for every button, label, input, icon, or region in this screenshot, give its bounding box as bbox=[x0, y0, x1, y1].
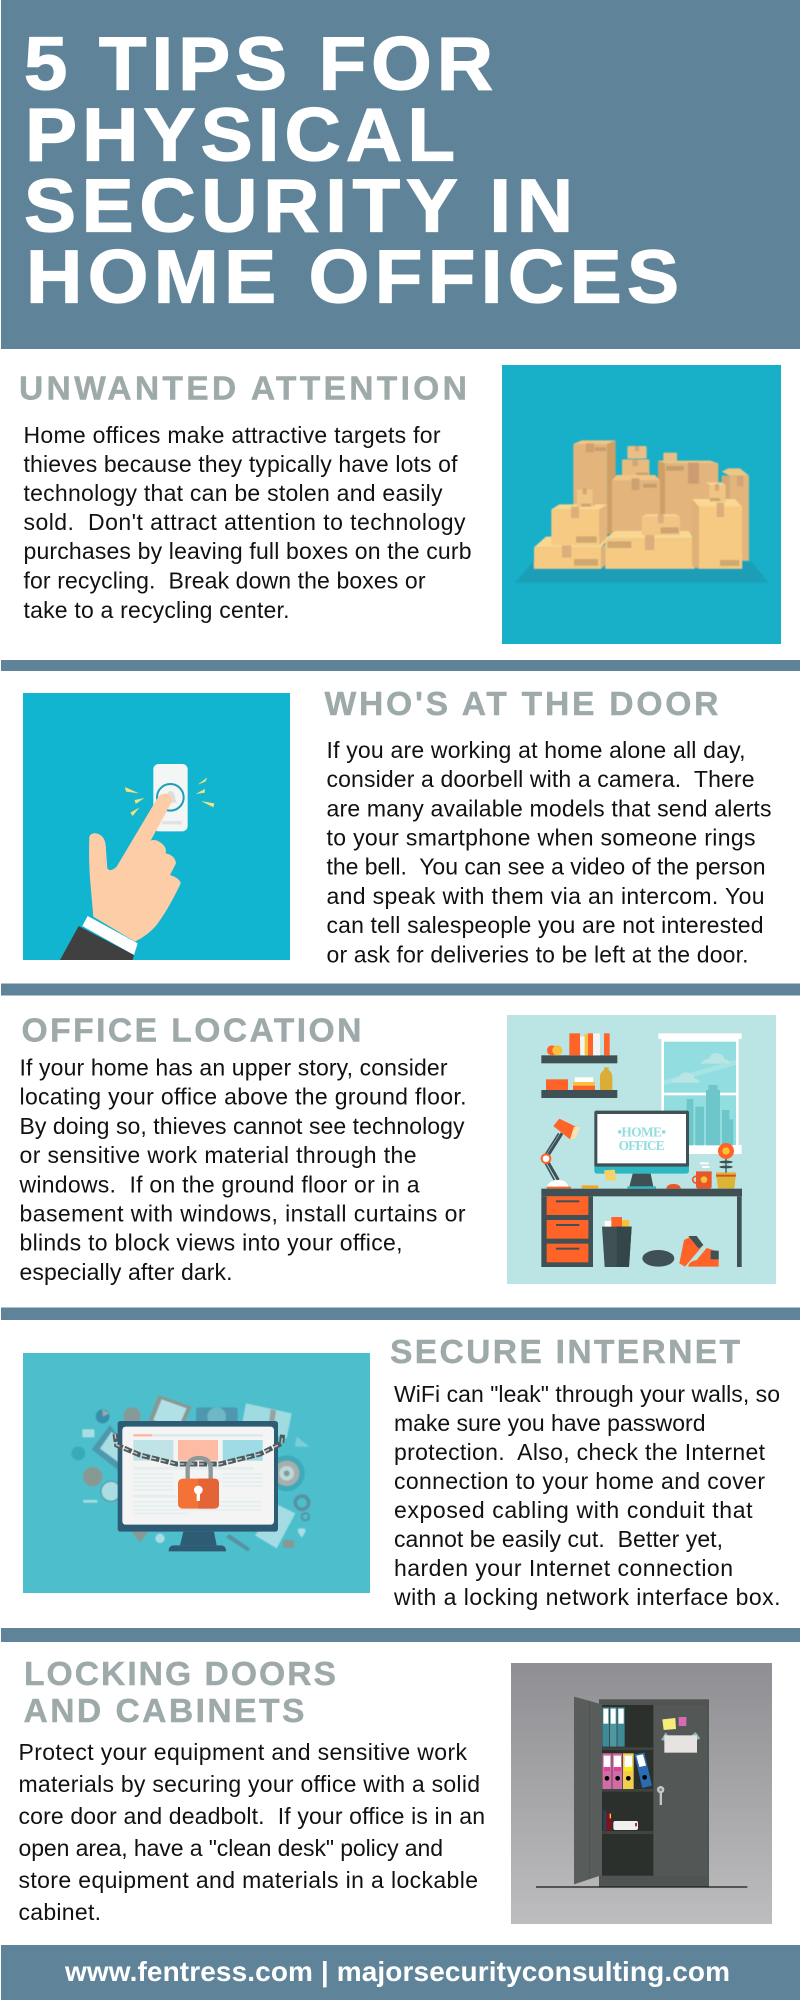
title: 5 TIPS FOR bbox=[24, 23, 493, 106]
title: SECURITY IN bbox=[24, 165, 573, 248]
divider bbox=[1, 1308, 800, 1320]
heading: locking doors and cabinets: LOCKING DOORS bbox=[24, 1656, 336, 1693]
center tall box bbox=[612, 475, 660, 534]
text block: locking doors and cabinets: core door and deadbolt. If your office is in an bbox=[18, 1803, 485, 1829]
text block: secure internet bbox=[393, 1381, 780, 1610]
books bbox=[603, 1810, 638, 1831]
left upper box bbox=[551, 486, 607, 545]
text block: unwanted attention: technology that can be stolen and easily bbox=[24, 480, 443, 506]
text block: locking doors and cabinets bbox=[18, 1739, 485, 1925]
panel: unwanted attention bbox=[19, 365, 781, 644]
text block: office location: or sensitive work material through the bbox=[20, 1142, 416, 1168]
heading: office location: OFFICE LOCATION bbox=[22, 1013, 361, 1050]
panel: secure internet bbox=[23, 1334, 780, 1610]
panel: who's at the door bbox=[23, 686, 771, 967]
monitor: OFFICE bbox=[619, 1138, 665, 1153]
text block: secure internet: connection to your home and cover bbox=[394, 1468, 765, 1494]
center wide box bbox=[605, 514, 695, 569]
chain bbox=[115, 1433, 283, 1464]
panel: locking doors and cabinets bbox=[18, 1656, 772, 1925]
footer links: www.fentress.com | majorsecurityconsulting.com bbox=[64, 1956, 730, 1987]
panel: office location bbox=[18, 1013, 776, 1285]
small stack bbox=[622, 446, 649, 477]
binders bbox=[602, 1707, 652, 1789]
shelves bbox=[541, 1033, 617, 1098]
text block: unwanted attention bbox=[24, 422, 472, 623]
text block: secure internet: protection. Also, check the Internet bbox=[394, 1439, 766, 1465]
desk bbox=[541, 1189, 742, 1267]
text block: unwanted attention: purchases by leaving full boxes on the curb bbox=[24, 538, 472, 564]
text block: secure internet: exposed cabling with conduit that bbox=[394, 1497, 753, 1523]
text block: locking doors and cabinets: open area, have a "clean desk" policy and bbox=[18, 1835, 443, 1861]
waste bin bbox=[602, 1217, 632, 1267]
illustration: locked monitor bbox=[23, 1353, 370, 1593]
text block: secure internet: make sure you have password bbox=[394, 1410, 706, 1436]
text block: office location: basement with windows, install curtains or bbox=[20, 1200, 466, 1226]
text block: secure internet: with a locking network interface box. bbox=[393, 1584, 780, 1610]
left lower box bbox=[534, 537, 610, 569]
illustration: cardboard boxes bbox=[502, 365, 781, 644]
heading: locking doors and cabinets bbox=[23, 1656, 336, 1730]
text block: office location: windows. If on the ground floor or in a bbox=[18, 1171, 420, 1197]
divider bbox=[1, 1628, 800, 1642]
text block: unwanted attention: thieves because they typically have lots of bbox=[24, 451, 458, 477]
heading: locking doors and cabinets: AND CABINETS bbox=[23, 1693, 304, 1730]
text block: who's at the door: can tell salespeople you are not interested bbox=[326, 912, 764, 938]
heading: unwanted attention: UNWANTED ATTENTION bbox=[19, 371, 467, 407]
text block: who's at the door: the bell. You can see a video of the person bbox=[326, 854, 766, 880]
far right box bbox=[722, 468, 749, 561]
text block: who's at the door: If you are working at home alone all day, bbox=[326, 737, 746, 763]
illustration: open cabinet bbox=[511, 1663, 772, 1924]
tall box bbox=[573, 440, 616, 534]
divider bbox=[1, 660, 800, 671]
background icons bbox=[71, 1395, 309, 1552]
text block: unwanted attention: sold. Don't attract attention to technology bbox=[24, 509, 466, 535]
heading: secure internet: SECURE INTERNET bbox=[390, 1334, 740, 1371]
title bbox=[24, 23, 679, 319]
text block: locking doors and cabinets: materials by securing your office with a solid bbox=[18, 1771, 480, 1797]
illustration: home office desk bbox=[507, 1015, 776, 1284]
text block: unwanted attention: for recycling. Break down the boxes or bbox=[24, 568, 426, 594]
text block: who's at the door: and speak with them via an intercom. You bbox=[326, 883, 764, 909]
text block: unwanted attention: take to a recycling center. bbox=[24, 597, 290, 623]
text block: locking doors and cabinets: cabinet. bbox=[18, 1899, 101, 1925]
text block: office location: By doing so, thieves cannot see technology bbox=[20, 1113, 465, 1139]
text block: who's at the door: are many available models that send alerts bbox=[326, 795, 772, 821]
football and shoes bbox=[642, 1236, 719, 1267]
desk items bbox=[582, 1143, 736, 1189]
window bbox=[658, 1033, 742, 1154]
divider bbox=[1, 984, 800, 996]
text block: office location: especially after dark. bbox=[20, 1259, 232, 1285]
padlock bbox=[178, 1458, 219, 1509]
title: PHYSICAL bbox=[25, 94, 455, 177]
monitor: •HOME• bbox=[617, 1125, 666, 1140]
notes bbox=[661, 1717, 700, 1753]
title banner bbox=[1, 0, 800, 349]
title: HOME OFFICES bbox=[26, 236, 679, 319]
text block: office location: locating your office above the ground floor. bbox=[20, 1084, 466, 1110]
screen content bbox=[133, 1434, 263, 1514]
text block: locking doors and cabinets: Protect your equipment and sensitive work bbox=[18, 1739, 468, 1765]
heading: who's at the door: WHO'S AT THE DOOR bbox=[324, 686, 718, 723]
lamp bbox=[542, 1119, 580, 1189]
back right box bbox=[658, 453, 718, 534]
illustration: finger pressing doorbell bbox=[23, 693, 290, 960]
text block: locking doors and cabinets: store equipment and materials in a lockable bbox=[18, 1867, 478, 1893]
text block: who's at the door: to your smartphone when someone rings bbox=[326, 824, 756, 850]
footer banner bbox=[1, 1945, 800, 2000]
text block: office location: blinds to block views into your office, bbox=[20, 1230, 402, 1256]
text block: who's at the door bbox=[326, 737, 772, 967]
text block: secure internet: harden your Internet connection bbox=[394, 1555, 733, 1581]
right front box bbox=[692, 482, 742, 569]
text block: who's at the door: or ask for deliveries to be left at the door. bbox=[326, 941, 748, 967]
text block: who's at the door: consider a doorbell with a camera. There bbox=[326, 766, 754, 792]
key bbox=[657, 1786, 664, 1805]
text block: office location: If your home has an upper story, consider bbox=[20, 1054, 448, 1080]
text block: unwanted attention: Home offices make attractive targets for bbox=[24, 422, 441, 448]
text block: office location bbox=[18, 1054, 466, 1285]
text block: secure internet: cannot be easily cut. Better yet, bbox=[394, 1526, 723, 1552]
monitor bbox=[594, 1111, 689, 1189]
text block: secure internet: WiFi can "leak" through your walls, so bbox=[394, 1381, 780, 1407]
